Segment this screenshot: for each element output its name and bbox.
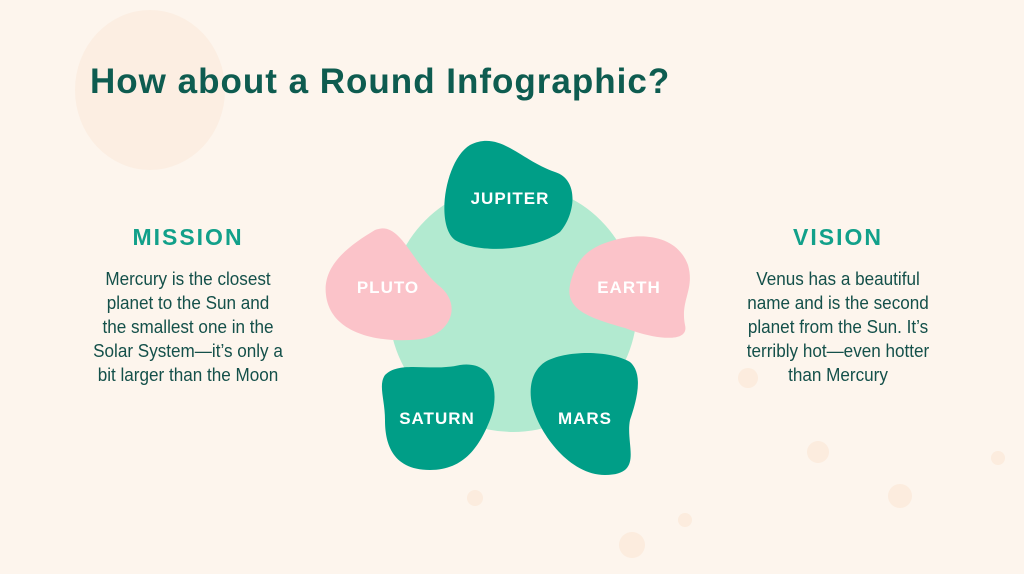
vision text: Venus has a beautiful	[756, 269, 920, 289]
blob: jupiter: JUPITER	[471, 189, 549, 208]
mission text: Mercury is the closest	[105, 269, 271, 289]
blob: pluto: PLUTO	[357, 278, 419, 297]
blob: saturn: SATURN	[399, 409, 475, 428]
mission heading: MISSION	[132, 224, 244, 250]
mission text: Solar System—it’s only a	[93, 341, 283, 361]
blob: jupiter	[444, 141, 572, 249]
center circle	[389, 184, 637, 432]
blob: earth: EARTH	[597, 278, 661, 297]
blob: earth	[569, 236, 690, 338]
mission text: planet to the Sun and	[107, 293, 269, 313]
blob: saturn	[382, 365, 495, 470]
mission text	[93, 269, 283, 385]
vision text: name and is the second	[747, 293, 929, 313]
title: How about a Round Infographic?	[90, 62, 670, 101]
vision text: planet from the Sun. It’s	[748, 317, 928, 337]
blob: mars: MARS	[558, 409, 612, 428]
blob: pluto	[326, 228, 452, 340]
vision text: than Mercury	[788, 365, 888, 385]
vision text: terribly hot—even hotter	[747, 341, 929, 361]
vision heading: VISION	[793, 224, 883, 250]
mission text: bit larger than the Moon	[98, 365, 278, 385]
vision text	[747, 269, 929, 385]
blob: mars	[531, 353, 638, 475]
mission text: the smallest one in the	[102, 317, 274, 337]
